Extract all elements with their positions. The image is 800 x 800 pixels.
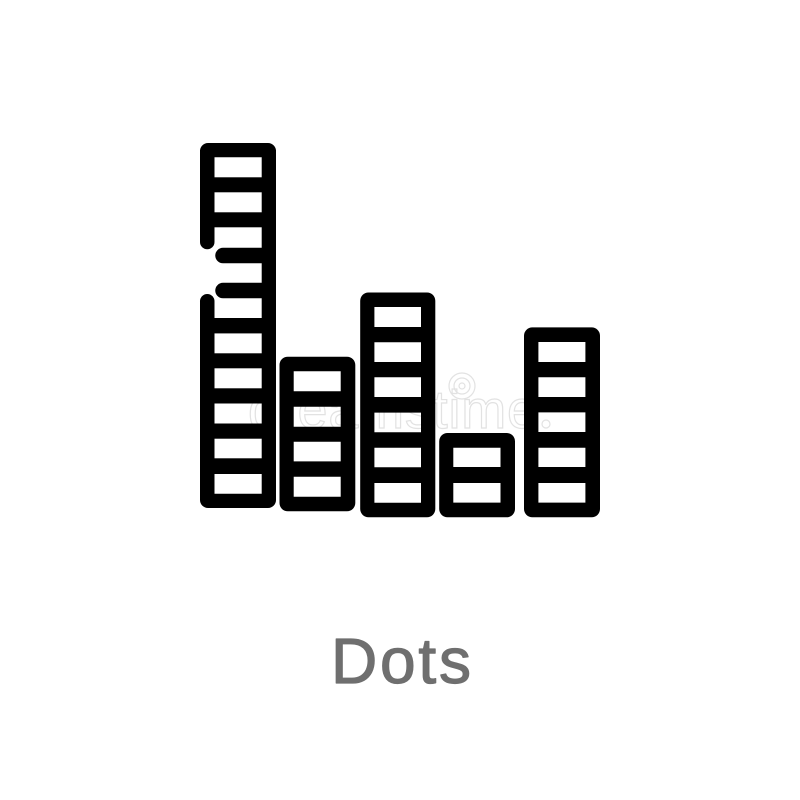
bar 2: four segments	[280, 357, 355, 511]
watermark: dreamstime	[248, 380, 537, 440]
bar 4: two segments	[439, 433, 515, 517]
bar 1: tallest stack with broken left edge	[200, 143, 276, 508]
bar 3: six segments	[360, 292, 435, 517]
title: Dots	[331, 625, 471, 697]
bar 5: five segments	[524, 327, 600, 517]
